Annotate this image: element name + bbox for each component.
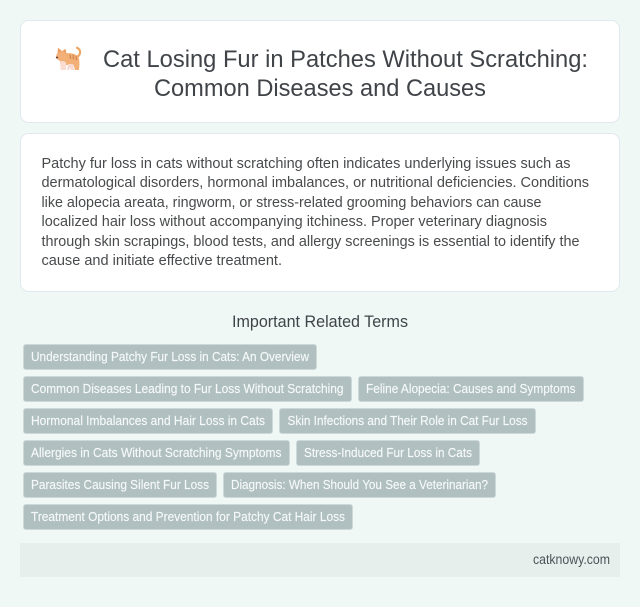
tag: feline alopecia xyxy=(358,376,584,402)
tag: stress: Stress-Induced Fur Loss in Cats xyxy=(304,445,472,460)
paragraph text: cause and initiate effective treatment. xyxy=(42,252,282,269)
heading: related terms: Important Related Terms xyxy=(232,313,408,331)
tag: diagnosis: Diagnosis: When Should You See a Veterinarian? xyxy=(231,477,488,492)
tag: treatment: Treatment Options and Prevention for Patchy Cat Hair Loss xyxy=(31,509,345,524)
title text xyxy=(103,46,588,102)
icon: cat xyxy=(56,48,80,70)
footer bar xyxy=(20,543,620,577)
panel: summary paragraph xyxy=(20,134,620,292)
paragraph text: through skin scrapings, blood tests, and allergy screenings is essential to identify the xyxy=(42,233,580,250)
paragraph text xyxy=(42,155,589,269)
paragraph text: like alopecia areata, ringworm, or stress-related grooming behaviors can cause xyxy=(42,194,542,211)
title text: Common Diseases and Causes xyxy=(154,75,486,102)
tag: parasites: Parasites Causing Silent Fur Loss xyxy=(31,477,209,492)
paragraph text: localized hair loss without accompanying itchiness. Proper veterinary diagnosis xyxy=(42,213,547,230)
tag: allergies xyxy=(24,440,290,466)
tag: stress xyxy=(296,440,480,466)
tag: diagnosis xyxy=(224,472,496,498)
paragraph text: dermatological disorders, hormonal imbalances, or nutritional deficiencies. Conditions xyxy=(42,174,589,191)
tag: common diseases: Common Diseases Leading to Fur Loss Without Scratching xyxy=(31,381,344,396)
tag: hormonal imbalances xyxy=(24,408,272,434)
tag: overview xyxy=(24,344,316,370)
tag: skin infections xyxy=(280,408,536,434)
title text: Cat Losing Fur in Patches Without Scratching: xyxy=(103,46,588,73)
tag: treatment xyxy=(24,504,352,530)
tag: overview: Understanding Patchy Fur Loss in Cats: An Overview xyxy=(31,349,310,364)
panel: title card xyxy=(20,20,620,122)
tag: skin infections: Skin Infections and Their Role in Cat Fur Loss xyxy=(288,413,528,428)
tag: common diseases xyxy=(24,376,352,402)
tag: parasites xyxy=(24,472,216,498)
paragraph text: Patchy fur loss in cats without scratching often indicates underlying issues such as xyxy=(42,155,571,172)
tag: allergies: Allergies in Cats Without Scratching Symptoms xyxy=(31,445,282,460)
tag: feline alopecia: Feline Alopecia: Causes and Symptoms xyxy=(366,381,576,396)
footer bar: catknowy.com xyxy=(533,552,610,567)
panel: related term tags xyxy=(24,344,584,530)
tag: hormonal imbalances: Hormonal Imbalances and Hair Loss in Cats xyxy=(31,413,265,428)
